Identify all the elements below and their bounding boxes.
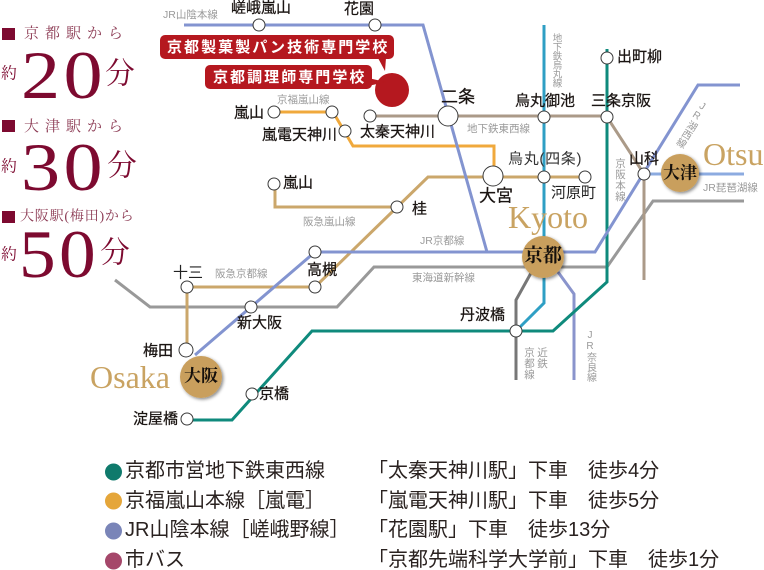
travel time from Kyoto station: 20	[21, 38, 106, 113]
line names: 東海道新幹線	[412, 271, 475, 284]
hub: Kyoto: 京都	[524, 244, 562, 266]
station names	[133, 0, 662, 428]
JR Biwako line	[644, 172, 744, 176]
station names: 三条京阪	[591, 92, 651, 110]
travel time from Kyoto station: 分	[105, 58, 135, 90]
travel time from Kyoto station: 京都駅から	[24, 25, 129, 42]
JR Sagano line	[184, 25, 487, 252]
access legend	[105, 459, 719, 570]
teal Keihan and Tozai line	[187, 49, 607, 420]
line names: 近鉄	[536, 347, 548, 369]
hub: Kyoto	[522, 236, 564, 278]
station names: 烏丸御池	[515, 92, 575, 110]
legend row: Keifuku Arashiyama line	[105, 489, 659, 512]
travel time from Otsu station: 約	[1, 158, 17, 176]
Hankyu lines	[187, 177, 585, 350]
travel time from Otsu station: 大津駅から	[24, 118, 129, 135]
travel time from Otsu station: 分	[107, 150, 137, 182]
line names: 阪急嵐山線	[303, 215, 356, 228]
station names: 花園	[344, 0, 374, 18]
callout: Kyoto confectionery school: 京都製菓製パン技術専門学校	[167, 38, 389, 56]
line names: JR山陰本線	[163, 8, 218, 21]
Tokaido Shinkansen line	[115, 201, 744, 307]
callout: Kyoto culinary school	[205, 65, 386, 89]
station names: 出町柳	[617, 48, 662, 66]
station names: 大宮	[479, 186, 513, 206]
travel time from Osaka station: 大阪駅(梅田)から	[20, 208, 135, 224]
station names: 嵐山	[234, 104, 264, 122]
Randen Arashiyama line	[274, 112, 494, 176]
legend row: subway Tozai line	[105, 459, 659, 482]
station names: 山科	[629, 150, 659, 168]
station names: 太秦天神川	[360, 124, 435, 140]
railway lines	[115, 25, 744, 420]
travel time from Otsu station: 30	[21, 130, 106, 205]
line names: 阪急京都線	[215, 267, 268, 280]
JR Kyoto and Kosei line	[195, 85, 740, 355]
city name: Kyoto: Kyoto	[508, 199, 588, 235]
line names: JR湖西線	[672, 99, 711, 150]
station names: 嵐山	[283, 174, 313, 192]
legend row: Keifuku Arashiyama line: 京福嵐山本線［嵐電］	[125, 489, 325, 512]
JR Nara line	[558, 272, 574, 380]
hub: Otsu: 大津	[663, 164, 697, 182]
station names: 河原町	[551, 184, 596, 202]
travel time from Otsu station	[1, 118, 137, 205]
travel times panel	[1, 25, 137, 292]
station names: 十三	[173, 264, 203, 282]
city name: Osaka: Osaka	[90, 359, 170, 395]
line names: 地下鉄烏丸線	[550, 32, 562, 88]
station names: 烏丸(四条)	[508, 150, 582, 168]
subway Tozai line, main section	[370, 114, 607, 118]
station names: 淀屋橋	[133, 410, 178, 428]
legend row: JR Sanin line: 「花園駅」下車 徒歩13分	[368, 518, 610, 541]
hub: Otsu	[661, 154, 699, 192]
legend row: subway Tozai line: 京都市営地下鉄東西線	[125, 459, 325, 482]
station names: 二条	[441, 88, 475, 106]
line names	[163, 8, 758, 383]
hub: Osaka: 大阪	[184, 366, 218, 386]
line names: 京福嵐山線	[277, 93, 330, 106]
Keihan main line	[607, 117, 644, 280]
legend row: JR Sanin line: JR山陰本線［嵯峨野線］	[125, 518, 349, 541]
legend row: JR Sanin line	[105, 518, 610, 541]
station names: 嵐電天神川	[262, 126, 337, 144]
school location marker	[160, 35, 409, 107]
callout: Kyoto culinary school: 京都調理師専門学校	[213, 68, 366, 86]
station names: 桂	[412, 200, 427, 218]
line names: JR京都線	[420, 234, 465, 247]
station names: 新大阪	[237, 314, 282, 332]
city name: Otsu: Otsu	[703, 136, 763, 172]
line names: 京阪本線	[614, 158, 626, 202]
hub: Osaka	[180, 356, 222, 398]
small stations	[179, 19, 650, 425]
Kintetsu Kyoto line	[516, 273, 531, 380]
callout: Kyoto confectionery school	[160, 35, 394, 71]
travel time from Osaka station: 分	[100, 236, 130, 270]
line names: JR奈良線	[584, 330, 596, 383]
legend row: subway Tozai line: 「太秦天神川駅」下車 徒歩4分	[368, 459, 659, 482]
station names: 丹波橋	[460, 306, 505, 324]
legend row: Keifuku Arashiyama line: 「嵐電天神川駅」下車 徒歩5分	[368, 489, 659, 512]
line names: 地下鉄東西線	[467, 122, 530, 135]
line names: 京都線	[523, 347, 535, 380]
subway Karasuma line	[516, 25, 544, 331]
station names: 高槻	[307, 262, 337, 278]
location dot	[375, 73, 409, 107]
station names: 梅田	[143, 342, 173, 360]
travel time from Kyoto station: 約	[1, 64, 17, 82]
travel time from Osaka station	[1, 208, 135, 292]
travel time from Osaka station: 約	[1, 246, 17, 264]
station names: 嵯峨嵐山	[231, 0, 291, 16]
travel time from Kyoto station	[1, 25, 135, 113]
travel time from Osaka station: 50	[19, 217, 99, 292]
line names: JR琵琶湖線	[703, 181, 758, 194]
legend row: city bus	[105, 548, 719, 570]
station names: 京橋	[259, 386, 289, 402]
